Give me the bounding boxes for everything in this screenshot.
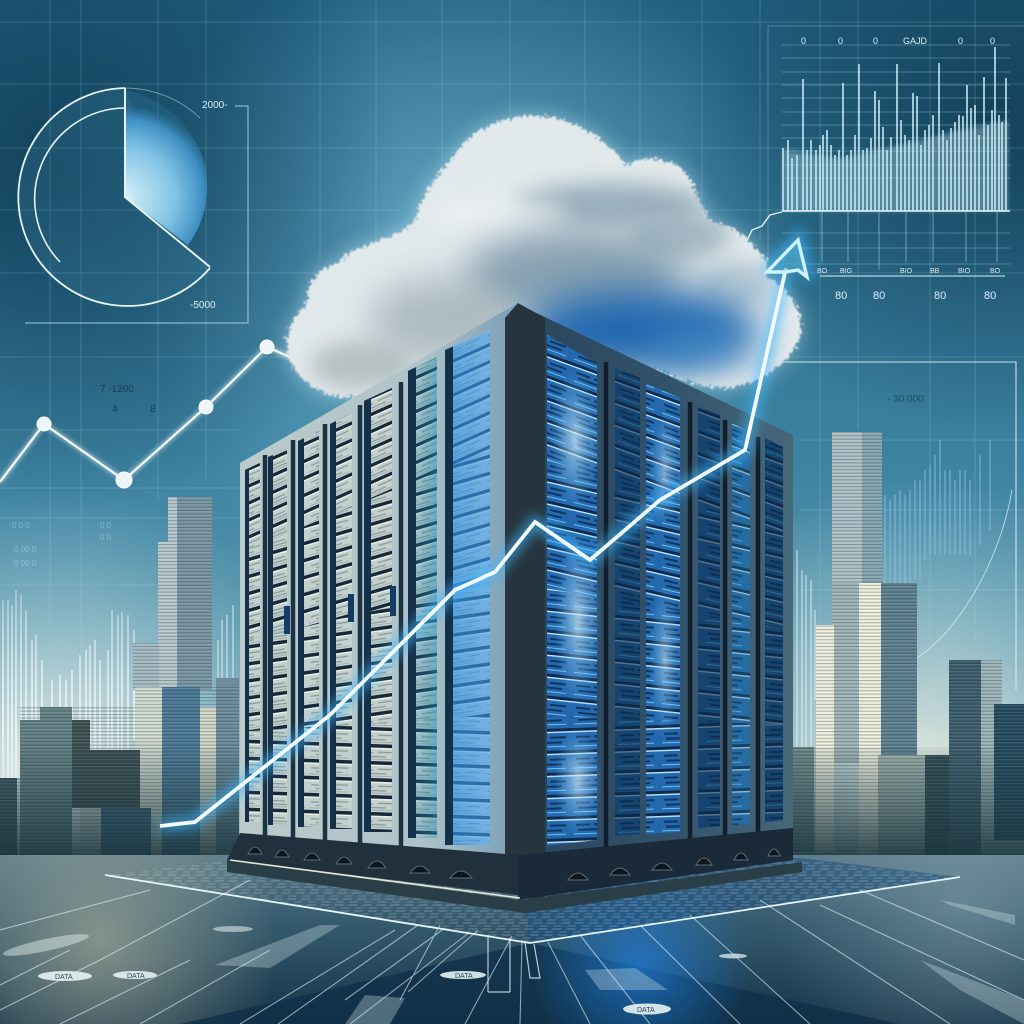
bar chart lower labels: BO: [817, 268, 828, 275]
bar chart top labels: 0: [990, 36, 995, 46]
line chart points: [37, 340, 274, 488]
floor: [0, 855, 1024, 1024]
floor outline: [105, 875, 960, 943]
plinth highlight: [230, 860, 520, 898]
bar chart lower labels: BIO: [958, 268, 971, 275]
arrow line: [160, 268, 786, 826]
left pale box: [80, 808, 102, 856]
rack right face: [530, 310, 793, 895]
cloud glow: [287, 116, 801, 398]
line chart line: [0, 347, 292, 482]
bar chart bottom labels: 80: [934, 290, 946, 302]
pie chart arcs: [18, 88, 210, 306]
floor circuit texture: [105, 860, 960, 943]
bar chart panel: [768, 26, 1024, 302]
floor traces: [0, 880, 1024, 1024]
city skyline right: [792, 432, 1024, 862]
far left block: [0, 778, 17, 858]
left grey block: [216, 678, 239, 853]
pie chart frame: [25, 106, 248, 323]
rack left face: [240, 303, 518, 890]
floor oval text: DATA: [55, 974, 73, 981]
right window slots: [547, 335, 783, 846]
floor light pools: [0, 855, 1024, 1024]
right small block: [792, 747, 814, 852]
faint right spikes: [797, 550, 815, 750]
rhombus dark tint: [520, 858, 960, 943]
faint left table text: 0 00 0: [14, 545, 37, 554]
city skyline left: [0, 497, 239, 858]
pie label top: 2000-: [202, 100, 228, 111]
faint left table text: 0 0 0: [12, 521, 30, 530]
rack door gaps left: [265, 382, 401, 852]
right tower side: [881, 583, 917, 858]
rack handles: [287, 586, 393, 634]
rack door gaps right: [606, 362, 758, 850]
arrow head: [767, 240, 807, 277]
pie chart panel: [18, 88, 248, 323]
bar chart lower labels: BB: [930, 268, 940, 275]
line chart glow: [0, 347, 292, 482]
bar chart top labels: GAJD: [903, 36, 928, 46]
growth arrow: [160, 212, 809, 826]
bar chart bars: [783, 47, 1006, 211]
right dark tower lit side: [981, 660, 1002, 858]
left dark towers: [72, 720, 140, 808]
left tower lit edge: [158, 497, 177, 687]
floor base: [0, 855, 1024, 1024]
bar chart soft fill: [783, 120, 1008, 211]
floor data blocks: [215, 900, 1024, 1024]
bar chart bottom labels: 80: [873, 290, 885, 302]
bar chart top labels: 0: [801, 36, 806, 46]
pie chart wedge: [125, 90, 207, 245]
left main tower: [20, 707, 72, 856]
floor dark centre: [180, 943, 900, 1024]
faint left spike chart: [3, 590, 134, 800]
floor oval text: DATA: [127, 973, 145, 980]
right panel spike chart: [885, 440, 990, 585]
floor oval labels: [2, 926, 747, 1014]
arrow link to chart: [745, 212, 782, 245]
rack base panel right: [518, 828, 793, 900]
bar chart lower labels: BO: [990, 268, 1001, 275]
cloud body: [287, 116, 801, 398]
bar chart baseline: [782, 210, 1010, 212]
left windows dark: [245, 330, 490, 845]
bar chart bottom labels: 80: [984, 290, 996, 302]
left line chart: [0, 340, 815, 800]
bar chart lower labels: BIO: [900, 268, 913, 275]
left tall tower: [158, 497, 212, 690]
right tall tower: [832, 432, 862, 584]
right low dark block: [925, 755, 950, 858]
left window slots: [245, 330, 490, 845]
right panel arc: [917, 490, 1012, 658]
faint left table text: 0 0: [100, 533, 112, 542]
right building shade: [792, 747, 1024, 860]
left building shade: [0, 740, 239, 858]
right windows dark: [547, 335, 783, 846]
bar chart bottom labels: 80: [835, 290, 847, 302]
right data panel: [770, 362, 1016, 690]
right low block: [878, 755, 925, 858]
right panel label: - 30 000: [887, 394, 924, 405]
right dark tower: [949, 660, 981, 858]
faint left table text: 0 0: [100, 521, 112, 530]
bar chart frame: [768, 26, 1024, 272]
floor oval text: DATA: [455, 973, 473, 980]
right pale tower: [859, 583, 881, 858]
cloud shading: [310, 183, 775, 389]
rack plinth: [227, 860, 802, 913]
faint centre left spikes: [218, 605, 233, 690]
faint left table text: 0 00 0: [14, 559, 37, 568]
right cream block: [816, 625, 834, 852]
floor ladder traces: [488, 935, 540, 992]
cloud: [287, 116, 801, 398]
pie label bottom: -5000: [190, 300, 216, 311]
right pale box: [990, 840, 1024, 862]
bar chart top labels: 0: [838, 36, 843, 46]
rack base panel left: [227, 833, 518, 895]
line chart label: 7 -1200: [100, 384, 134, 395]
left blue block: [162, 687, 200, 855]
line chart label: 8: [150, 404, 156, 415]
left building stripes: [0, 497, 239, 858]
left cream block: [200, 707, 222, 853]
rack base notches: [248, 847, 780, 880]
bar chart lower labels: BIG: [840, 268, 852, 275]
right tall tower side: [862, 432, 882, 584]
right panel frame: [770, 362, 1016, 690]
right tower lower section: [832, 583, 859, 763]
floor blue pool: [0, 855, 1024, 1024]
bar chart top labels: 0: [958, 36, 963, 46]
left low blue block: [101, 808, 151, 856]
server racks: [227, 300, 802, 913]
bar chart top labels: 0: [873, 36, 878, 46]
rack lights: [549, 370, 681, 835]
right far dark tower: [994, 704, 1024, 862]
bar chart stems: [822, 211, 997, 270]
pie chart ring band: [18, 88, 210, 306]
right building stripes: [792, 432, 1024, 862]
left pale tower: [133, 643, 159, 690]
arrow glow: [160, 238, 809, 826]
left mid block: [135, 687, 162, 855]
bar chart axis rule: [820, 275, 1005, 277]
line chart label: 4: [112, 404, 118, 415]
floor oval text: DATA: [637, 1007, 655, 1014]
rack corner: [505, 303, 545, 900]
